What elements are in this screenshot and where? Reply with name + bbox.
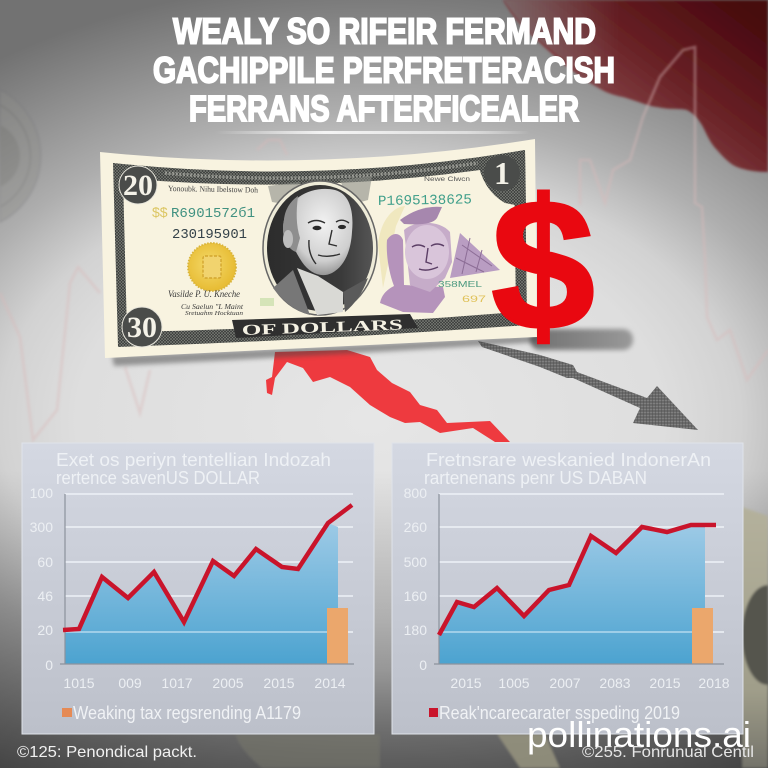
bill shadow	[112, 335, 540, 366]
y axis labels	[30, 485, 53, 673]
facial features	[308, 220, 349, 264]
title	[153, 10, 615, 129]
y axis labels: 20	[37, 622, 53, 638]
signatures: Vasilde P. U. Kneche	[168, 289, 240, 299]
top microtext band	[165, 163, 478, 178]
denomination band: OF DOLLARS	[242, 317, 403, 339]
x axis labels: 2014	[314, 675, 346, 691]
serial numbers	[152, 192, 472, 243]
panel: right chart	[392, 443, 743, 734]
y axis labels: 100	[30, 485, 53, 501]
legend: Reak'ncarecarater sspeding 2019	[439, 703, 680, 723]
panel heading: Fretnsrare weskanied IndonerAn	[426, 450, 711, 470]
signatures	[168, 289, 244, 317]
y axis labels	[404, 485, 427, 673]
y axis labels: 46	[37, 588, 53, 604]
faint background chart lines	[0, 47, 768, 440]
watermark: pollinations.ai	[527, 714, 751, 755]
x axis labels: 2018	[698, 675, 730, 691]
y axis labels: 180	[404, 622, 427, 638]
bottom currency scraps	[235, 507, 768, 768]
panel heading	[424, 450, 711, 488]
cravat	[297, 268, 343, 315]
head	[404, 223, 452, 292]
title: WEALY SO RIFEIR FERMAND	[173, 10, 596, 52]
corner numerals	[119, 150, 526, 347]
axes	[60, 494, 354, 664]
hair	[283, 196, 300, 252]
coat	[273, 270, 310, 315]
legend: Weaking tax regsrending A1179	[73, 703, 301, 723]
red blob top right	[503, 0, 768, 172]
area series	[439, 525, 705, 664]
dollar bill: 697	[462, 294, 486, 304]
panel heading: rertence savenUS DOLLAR	[56, 468, 260, 488]
serial numbers: 230195901	[172, 227, 247, 243]
purple portrait	[378, 206, 500, 313]
x axis labels: 009	[118, 675, 142, 691]
area series	[65, 523, 338, 664]
guilloche frame	[113, 150, 527, 347]
red line	[439, 525, 716, 635]
head	[283, 189, 352, 275]
x axis labels: 2007	[549, 675, 581, 691]
corner numerals: 20	[123, 169, 153, 202]
x axis labels: 1017	[161, 675, 193, 691]
x axis labels: 2015	[649, 675, 681, 691]
panel heading	[56, 450, 331, 488]
central portrait	[263, 176, 377, 315]
corner numerals: 1	[494, 155, 510, 191]
x axis labels: 2083	[599, 675, 631, 691]
bust	[380, 234, 445, 313]
dollar bill	[100, 139, 540, 366]
orange bar	[327, 608, 348, 664]
left seal coin	[0, 90, 41, 222]
hat	[400, 207, 442, 224]
corner numerals: 30	[127, 311, 157, 344]
gold seal	[188, 243, 236, 291]
y axis labels: 60	[37, 554, 53, 570]
y axis labels: 0	[419, 657, 427, 673]
footer right: ©255. Fonrunual Centil	[582, 744, 754, 761]
axes	[434, 494, 724, 664]
signatures: Sretuahm Hocktuan	[185, 311, 243, 317]
title: FERRANS AFTERFICEALER	[189, 88, 579, 129]
panel: left chart	[22, 443, 374, 734]
red dollar sign: $	[491, 162, 595, 369]
y axis labels: 160	[404, 588, 427, 604]
serial numbers: P1695138625	[378, 192, 472, 210]
falling red arrow	[266, 350, 510, 442]
small print: Yonoubk. Nihu Ibelstow Doh	[168, 184, 258, 195]
x axis labels: 2015	[263, 675, 295, 691]
bill paper	[100, 139, 537, 358]
y axis labels: 260	[404, 519, 427, 535]
x axis labels: 1005	[498, 675, 530, 691]
dollar bill: 358MEL	[438, 279, 482, 289]
dollar bill: Newe Clwcn	[424, 176, 470, 183]
gridlines	[439, 494, 724, 632]
y axis labels: 300	[30, 519, 53, 535]
panel heading: Exet os periyn tentellian Indozah	[56, 450, 331, 470]
x axis labels	[450, 675, 730, 691]
title: GACHIPPILE PERFRETERACISH	[153, 50, 615, 90]
x axis labels	[63, 675, 346, 691]
triangle fan	[450, 233, 500, 278]
x axis labels: 2015	[450, 675, 482, 691]
denomination band	[232, 314, 418, 339]
y axis labels: 800	[404, 485, 427, 501]
serial numbers: R6901572б1	[171, 205, 255, 222]
signatures: Cu Saelun "L Maint	[181, 303, 244, 311]
x axis labels: 2005	[212, 675, 244, 691]
falling gray arrow	[478, 329, 698, 430]
y axis labels: 500	[404, 554, 427, 570]
x axis labels: 1015	[63, 675, 95, 691]
gridlines	[65, 494, 353, 632]
red line	[63, 505, 352, 630]
footer left: ©125: Penondical packt.	[17, 744, 197, 761]
panel heading: rartenenans penr US DABAN	[424, 468, 647, 488]
serial numbers: $$	[152, 204, 168, 220]
y axis labels: 0	[45, 657, 53, 673]
orange bar	[692, 608, 713, 664]
